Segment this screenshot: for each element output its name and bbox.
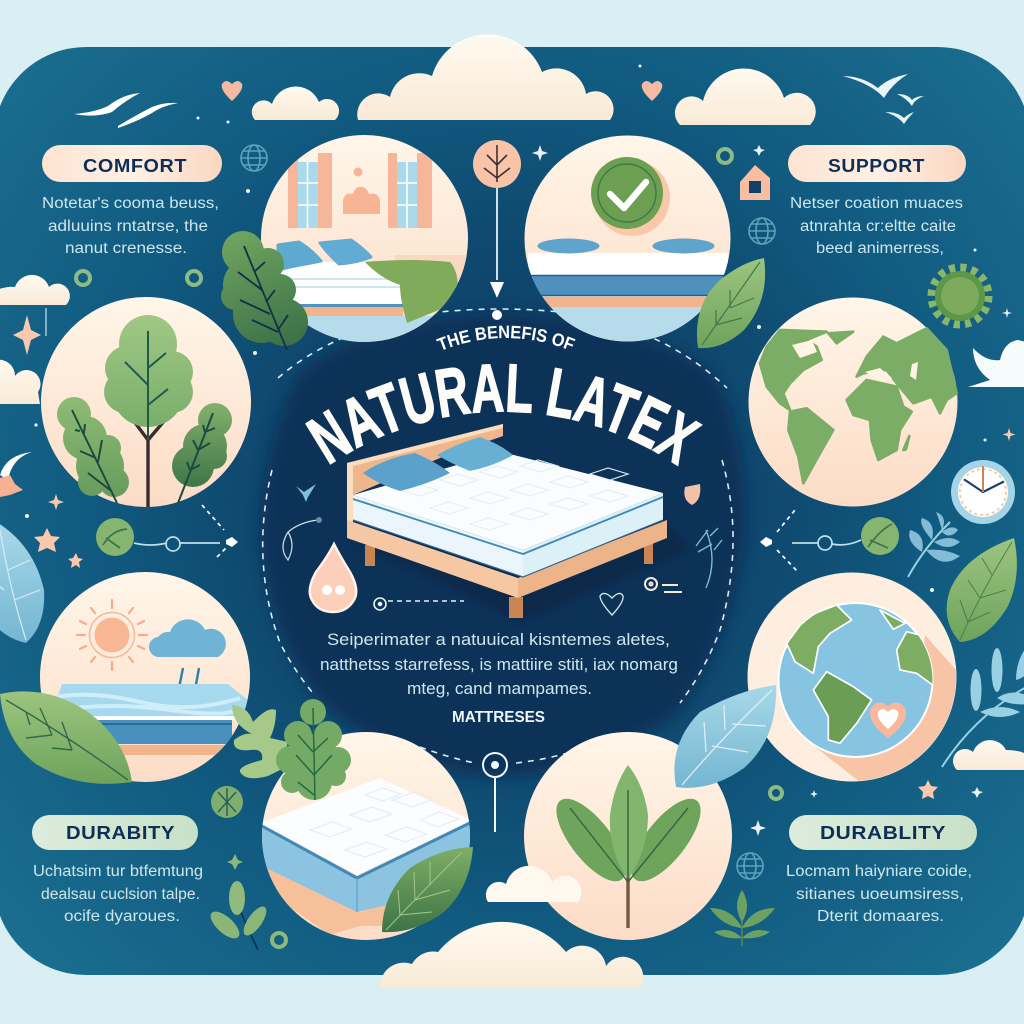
durablity body text: sitianes uoeumsiress, [796,886,964,903]
blue globe [778,602,935,758]
icon: blue feather sprig [908,512,960,577]
durablity body text: Locmam haiyniare coide, [786,863,972,880]
icon: heart badge [870,702,906,738]
circle: globe [748,572,965,790]
headboard [347,424,503,530]
durabity body text [33,863,203,925]
icon: sun gear [932,268,988,324]
comfort body text [42,195,219,257]
icon: green rings [76,149,782,799]
icon: green check badge [591,157,670,236]
globe long shadow [800,635,956,781]
text: centre description: natthetss starrefess, is mattiire stiti, iax nomarg [320,656,678,674]
leaf: large blue left edge [0,523,44,643]
north america [760,330,827,410]
heading: natural latex: NATURAL LATEX [305,364,703,466]
icon: blue sprig right edge [942,645,1024,767]
text: centre description: mteg, cand mampames. [407,680,592,698]
support body text: Netser coation muaces [790,195,963,212]
icon: compass badge bottom left [211,786,243,818]
support pill [788,145,966,182]
central dark area [260,312,746,778]
panel: comfort label and text [42,145,222,257]
durablity body text: Dterit domaares. [817,908,944,925]
leaf: top right circle overlap [697,258,765,348]
icon: white bird [968,340,1024,387]
circle: bedroom comfort scene [260,135,470,346]
comfort heading: COMFORT [83,156,187,176]
small decorative sparkles [12,64,1012,836]
cloud: top left small [252,86,339,120]
left window and curtains [288,153,332,228]
icon: heart outline [600,593,623,615]
icon: rain cloud [149,619,226,690]
leaf: light oak bottom centre [232,705,288,778]
small cloud [486,866,581,902]
icon: clock [951,460,1015,524]
map cutouts [792,340,918,382]
icon: house [740,165,770,200]
icon: small peach leaf [684,484,700,505]
dashed outline of central area [263,309,733,763]
south america [788,408,833,483]
panel: support label and text [788,145,966,257]
circle: plant [486,732,732,940]
durablity heading: DURABLITY [820,823,946,843]
icon: small blue butterfly [296,484,316,502]
cloud: left lower edge [0,360,41,404]
circle: weather and cooling scene [40,572,250,782]
tree: right [172,403,232,503]
durablity body text [786,863,972,925]
cloud: bottom centre [380,922,643,988]
comfort body text: nanut crenesse. [65,240,187,257]
icon: right vine with green bud [760,510,899,572]
circle: trees [41,297,251,507]
icon: green ring bottom left [272,933,286,947]
leaf: green bottom centre [382,847,473,932]
support heading: SUPPORT [828,156,925,176]
icon: small fern [696,528,722,588]
cloud: top right [675,69,816,125]
leaf: blue middle right [674,685,776,788]
wall art [343,168,380,214]
right window and curtains [388,153,432,228]
icon: globe outline bottom right [737,853,763,879]
blanket [365,260,458,323]
mattresses label: MATTRESES [452,709,545,726]
cloud: right lower edge [953,740,1024,770]
frame [267,868,386,934]
support body text: atnrahta cr:eltte caite [800,218,956,235]
icon: latex drop [310,544,356,612]
pillows [278,242,321,270]
cloud: top centre [357,34,614,120]
mattress sides [353,495,523,577]
panel: left durability label and text [32,815,203,925]
text: centre description: Seiperimater a natuuical kisntemes aletes, [327,631,670,649]
arrow: top connector with badge [473,140,521,320]
birds: top right [843,74,924,124]
madagascar [903,436,909,450]
durabity body text: dealsau cuclsion talpe. [41,886,200,903]
icon: globe outline top right [749,218,775,244]
plant [544,765,713,928]
icon: globe outline top left [241,145,267,171]
durablity pill [789,815,977,850]
icon: small green plant bottom right [710,890,775,946]
mattress top [353,452,663,550]
greenland [828,332,853,343]
leaf: green right [947,538,1017,642]
shadow [352,505,690,622]
circle: world map [748,298,958,506]
comfort pill [42,145,222,182]
mattress top [260,778,472,875]
icon: green star sparkle [227,854,243,870]
icon: thin tick beneath left cloud [45,308,47,336]
tree: centre [104,315,193,507]
birds: top left [74,93,178,128]
durabity body text: ocife dyaroues. [64,908,180,925]
durabity heading: DURABITY [66,823,175,843]
durabity body text: Uchatsim tur btfemtung [33,863,203,880]
text: centre description [320,631,678,726]
leaf: dark oak bottom centre [276,699,351,800]
comfort body text: Notetar's cooma beuss, [42,195,219,212]
icon: sun [77,600,147,670]
icon: heart top right [642,81,662,101]
leaf: oak top left [221,231,308,350]
support body text: beed animerress, [816,240,944,257]
icon: small dial [645,578,682,592]
circle: mattress with leaves [260,732,472,940]
mattress sides [260,822,472,912]
icon: pink creature left edge [0,452,32,497]
tree: left [57,397,129,503]
support body text [790,195,963,257]
icon: peach stars [13,315,1016,799]
durabity pill [32,815,198,850]
eurasia [857,328,957,413]
mattress [280,262,402,304]
heading: the benefits of: THE BENEFIS OF [436,326,576,350]
africa [847,380,912,460]
peach backdrop and floor [395,255,470,280]
circle: check mark support scene [524,136,734,345]
comfort body text: adluuins rntatrse, the [48,218,208,235]
cloud: left edge [0,275,70,305]
legs [365,543,653,618]
pillows [363,453,450,491]
icon: seed wisp [283,517,322,560]
frame [347,520,518,598]
leaf: large green bottom left [0,691,132,784]
arrow: bottom connector [483,753,507,832]
panel: right durability label and text [786,815,977,925]
icon: dotted marker below bed [374,598,464,610]
icon: left vine with green bud [96,505,238,557]
icon: small green plant bottom left [206,881,270,950]
icon: heart top left [222,81,242,101]
bed illustration [347,424,690,622]
